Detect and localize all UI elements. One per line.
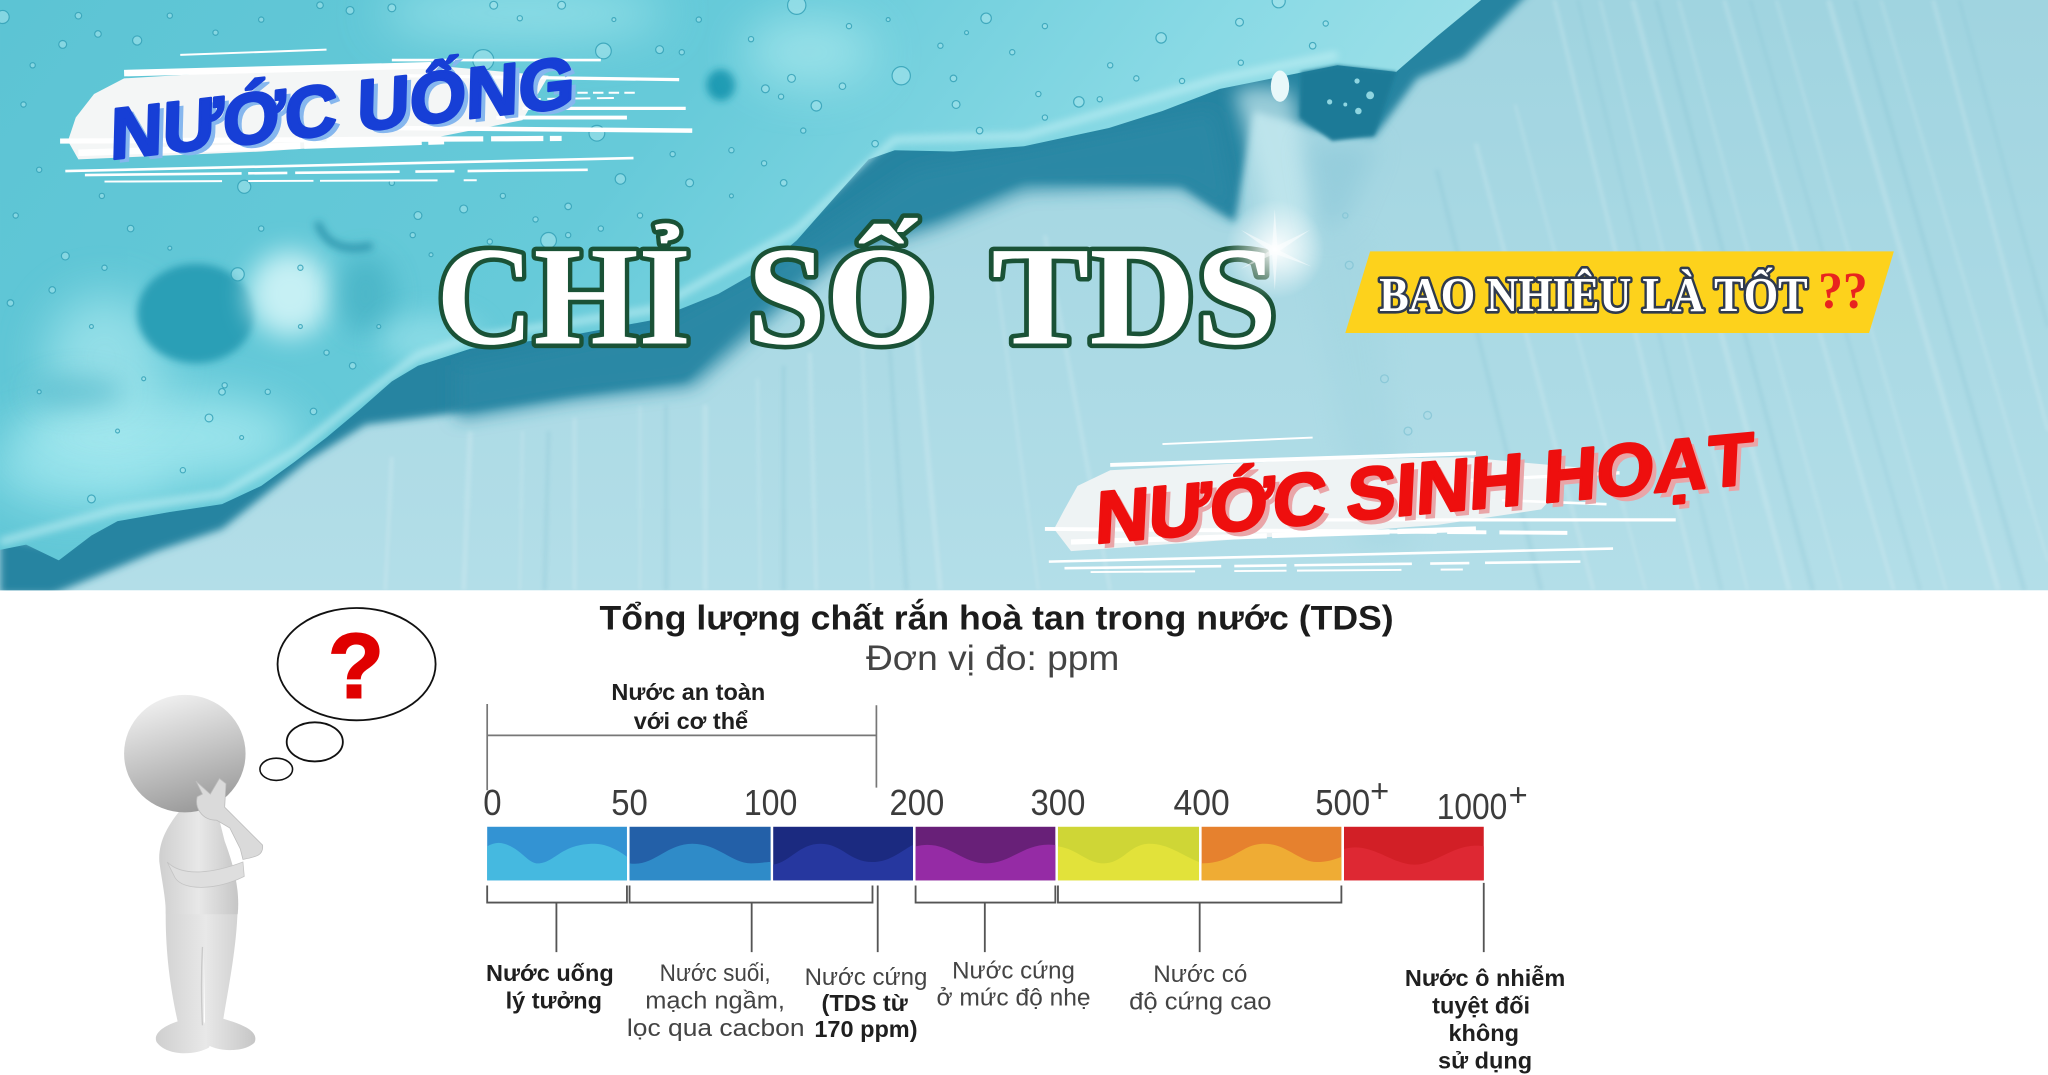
label: polluted water: Nước ô nhiễm: [1405, 964, 1565, 991]
dark pool with droplets: [1300, 65, 1396, 141]
yellow band: [1345, 251, 1894, 333]
main title: CHỈ SỐ TDS: SỐ: [747, 217, 936, 375]
chart title: Tổng lượng chất rắn hoà tan trong nước (TDS): [600, 600, 1394, 638]
label: hard water from 170 ppm: (TDS từ: [822, 990, 909, 1016]
label: polluted water: [1405, 964, 1565, 1073]
TDS scale numbers: 500: [1315, 782, 1370, 823]
banner: water background: [0, 0, 2048, 594]
label: hard water from 170 ppm: 170 ppm): [814, 1016, 918, 1042]
safe range bracket: [487, 679, 876, 790]
segment 0-50: [487, 827, 627, 880]
range brackets and leader lines: [487, 883, 1484, 952]
sparkle: [1225, 200, 1324, 299]
segment 200-300: [916, 827, 1055, 880]
label: very hard water: Nước có: [1153, 961, 1247, 988]
raised arm and hand: [196, 778, 263, 859]
label: spring water: lọc qua cacbon: [627, 1015, 805, 1042]
label: spring water: Nước suối,: [660, 960, 771, 987]
TDS scale numbers: 100: [744, 782, 797, 823]
label: mildly hard water: ở mức độ nhẹ: [936, 985, 1091, 1012]
main title: CHỈ SỐ TDS: CHỈ: [436, 218, 691, 375]
label: ideal drinking water: [486, 960, 614, 1013]
TDS scale numbers: 0: [483, 782, 502, 823]
label: ideal drinking water: Nước uống: [486, 960, 614, 986]
main title: CHỈ SỐ TDS: TDS: [991, 218, 1277, 375]
heading banner: NƯỚC UỐNG: [60, 40, 692, 182]
main title: CHỈ SỐ TDS: [436, 217, 1277, 375]
title text: NƯỚC UỐNG: [109, 40, 576, 175]
label: very hard water: độ cứng cao: [1129, 989, 1272, 1016]
TDS scale numbers: 400: [1174, 782, 1230, 823]
TDS scale numbers: +: [1509, 776, 1528, 813]
forearm across body: [167, 862, 244, 887]
segment 50-100: [630, 827, 771, 880]
torso: [159, 807, 238, 914]
head: [124, 695, 246, 812]
label: mildly hard water: Nước cứng: [952, 957, 1075, 984]
water sheet: [0, 0, 1528, 590]
red question marks: ??: [1818, 262, 1868, 320]
label: hard water from 170 ppm: [805, 964, 927, 1042]
waterfall highlight: [1234, 87, 1317, 274]
label: hard water from 170 ppm: Nước cứng: [805, 964, 927, 991]
water droplets: [0, 0, 1374, 503]
TDS scale numbers: 300: [1031, 782, 1085, 823]
label: mildly hard water: [936, 957, 1091, 1012]
title text: NƯỚC SINH HOẠT: [1094, 416, 1755, 559]
label: ideal drinking water: lý tưởng: [506, 987, 602, 1013]
label: polluted water: sử dụng: [1438, 1047, 1532, 1073]
callout: BAO NHIÊU LÀ TỐT: [1345, 251, 1894, 333]
shadow text: NƯỚC SINH HOẠT: [1099, 422, 1760, 565]
icon: thinking figure: [124, 695, 263, 1053]
label: very hard water: [1129, 961, 1272, 1016]
TDS scale numbers: 1000: [1437, 786, 1507, 827]
label: spring water: [627, 960, 805, 1042]
segment 300-400: [1058, 827, 1199, 880]
TDS scale numbers: 200: [889, 782, 944, 823]
brush strokes behind NƯỚC SINH HOẠT: [1045, 438, 1676, 572]
segment 500-1000: [1344, 827, 1484, 880]
legs and feet: [156, 901, 255, 1053]
label: polluted water: không: [1449, 1020, 1519, 1046]
segment 400-500: [1202, 827, 1341, 880]
heading banner: NƯỚC SINH HOẠT: [1045, 416, 1760, 572]
chart unit subtitle: Đơn vị đo: ppm: [866, 639, 1119, 678]
shadow text: NƯỚC UỐNG: [115, 44, 581, 179]
TDS scale numbers: +: [1370, 772, 1389, 809]
sheet shadow band: [0, 0, 1535, 594]
label: polluted water: tuyệt đối: [1432, 993, 1530, 1019]
TDS scale numbers: [483, 772, 1528, 827]
label: spring water: mạch ngầm,: [645, 987, 785, 1014]
callout text: BAO NHIÊU LÀ TỐT: [1379, 267, 1808, 322]
segment 100-200: [773, 827, 913, 880]
safe range bracket: với cơ thể: [634, 708, 748, 734]
TDS colour bar: [487, 827, 1484, 880]
brush strokes behind NƯỚC UỐNG: [60, 50, 692, 182]
TDS scale numbers: 50: [611, 782, 648, 823]
safe range label: Nước an toàn: [611, 679, 765, 705]
thought bubble: [260, 608, 436, 780]
red question mark: ?: [328, 615, 384, 717]
